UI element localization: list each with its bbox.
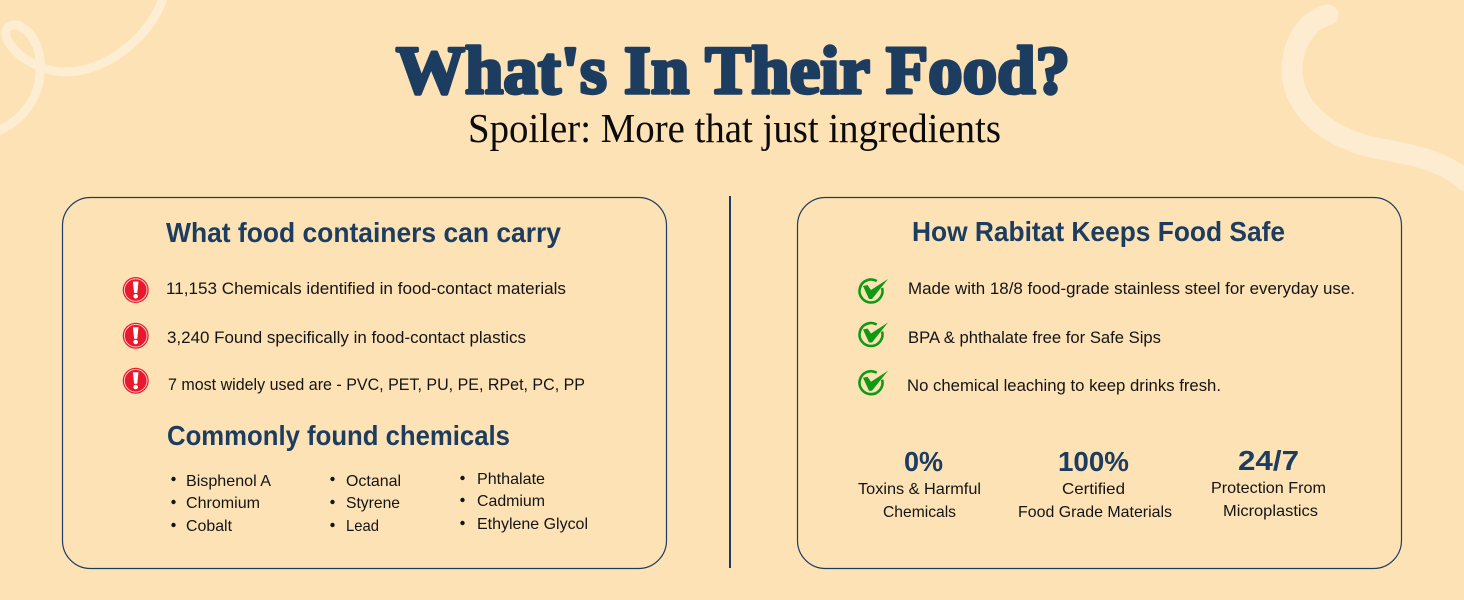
chemicals list column 2: Lead [346, 518, 379, 535]
panel: what food containers can carry [62, 198, 666, 568]
stat: 100%: Certified [1062, 481, 1125, 498]
chemicals list column 2 [330, 473, 401, 535]
panel heading: How Rabitat Keeps Food Safe [912, 216, 1285, 247]
alert text 2: 3,240 Found specifically in food-contact plastics [167, 329, 526, 347]
title: What's In Their Food? [396, 32, 1070, 108]
decorative swirl: top right [1292, 15, 1464, 181]
icon: alert 1 [123, 277, 149, 303]
panel heading: What food containers can carry [166, 217, 561, 248]
chemicals list column 2: Styrene [346, 495, 400, 512]
panel: how Rabitat keeps food safe [798, 198, 1402, 568]
icon: alert 2 [123, 323, 149, 349]
stat: 100%: 100% [1058, 446, 1129, 477]
check text 1: Made with 18/8 food-grade stainless steel for everyday use. [908, 280, 1355, 298]
chemicals list column 1: Cobalt [186, 518, 233, 535]
stat: 24/7: Protection From [1211, 480, 1326, 497]
decorative swirl: top left [0, 0, 163, 131]
chemicals list column 1 [171, 473, 271, 535]
stat: 24/7: Microplastics [1223, 503, 1318, 520]
check text 2: BPA & phthalate free for Safe Sips [908, 329, 1161, 347]
check text 3: No chemical leaching to keep drinks fresh. [907, 377, 1221, 395]
chemicals list column 2: Octanal [346, 473, 401, 490]
chemicals list column 3: Phthalate [477, 471, 545, 488]
chemicals list column 1: Bisphenol A [186, 473, 271, 490]
stat: 0%: Toxins & Harmful [858, 481, 981, 498]
icon: check 1 [859, 279, 888, 302]
stat: 24/7 [1211, 445, 1326, 520]
stat: 100%: Food Grade Materials [1018, 504, 1172, 521]
subheading: Commonly found chemicals [167, 420, 510, 451]
icon: check 3 [859, 371, 888, 394]
stat: 24/7: 24/7 [1238, 445, 1299, 476]
alert text 3: 7 most widely used are - PVC, PET, PU, PE, RPet, PC, PP [168, 376, 585, 394]
chemicals list column 3: Cadmium [477, 493, 545, 510]
alert text 1: 11,153 Chemicals identified in food-contact materials [166, 280, 566, 298]
stat: 0%: 0% [904, 446, 943, 477]
stat: 0% [858, 446, 981, 521]
divider [729, 196, 731, 568]
chemicals list column 1: Chromium [186, 495, 260, 512]
stat: 100% [1018, 446, 1172, 521]
icon: alert 3 [123, 368, 149, 394]
icon: check 2 [859, 322, 888, 346]
stat: 0%: Chemicals [883, 504, 956, 521]
chemicals list column 3 [460, 471, 588, 533]
subtitle: Spoiler: More that just ingredients [468, 105, 1001, 151]
chemicals list column 3: Ethylene Glycol [477, 516, 588, 533]
